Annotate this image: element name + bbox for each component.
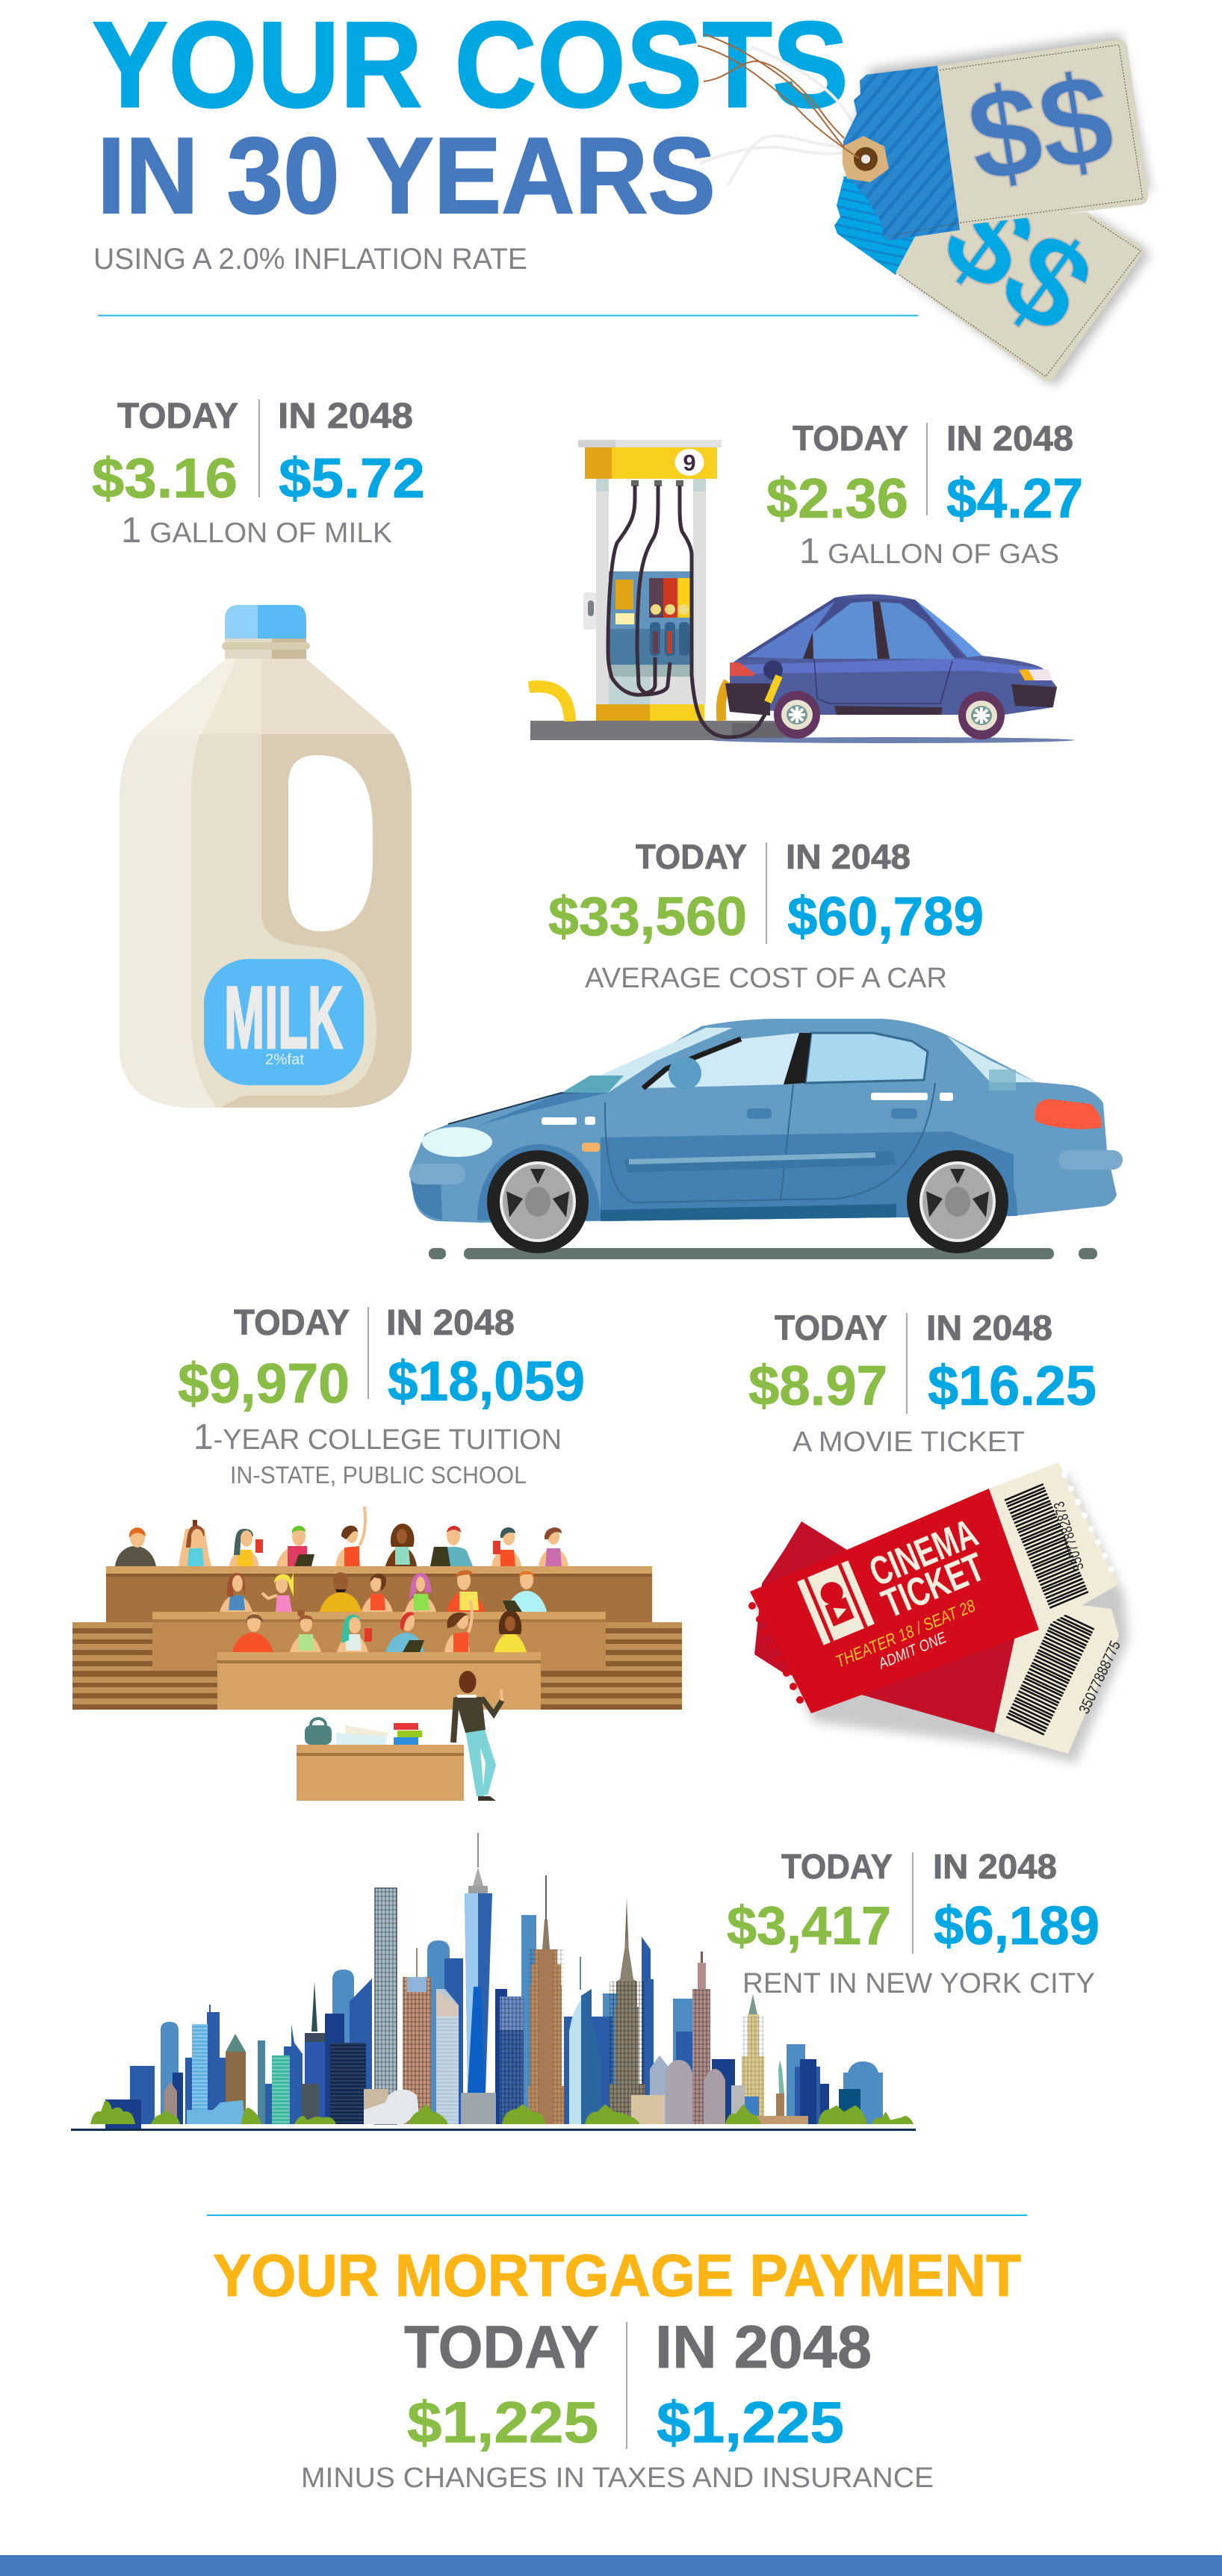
panel: milk price: TODAY	[117, 397, 238, 436]
statue of liberty	[752, 2060, 808, 2124]
panel: car price: $60,789	[787, 887, 984, 947]
desk items	[305, 1719, 422, 1745]
jug label: 2%fat	[265, 1052, 304, 1068]
jug cap	[222, 605, 310, 659]
title	[92, 0, 849, 236]
brick tower	[403, 1948, 431, 2124]
panel: gas price: TODAY	[793, 418, 908, 458]
subtitle: USING A 2.0% INFLATION RATE	[93, 243, 527, 276]
icon: cinema tickets	[748, 1462, 1128, 1763]
tag 1: $$	[958, 46, 1122, 210]
dark tower	[330, 2043, 366, 2124]
panel: tuition price: $18,059	[388, 1350, 585, 1412]
panel: milk price: $5.72	[279, 447, 425, 509]
panel: milk price: 1 GALLON OF MILK	[121, 511, 392, 550]
panel: rent price: RENT IN NEW YORK CITY	[742, 1968, 1095, 1999]
panel: mortgage price: $1,225	[407, 2389, 598, 2455]
panel: tuition price: 1-YEAR COLLEGE TUITION	[193, 1418, 562, 1457]
lecturer desk	[297, 1745, 464, 1801]
panel: tuition price: $9,970	[178, 1352, 350, 1415]
panel: gas price: $4.27	[946, 467, 1083, 530]
panel: tuition price: IN 2048	[386, 1303, 515, 1343]
tag 2: $$	[919, 161, 1118, 361]
icon: lecture hall	[72, 1506, 682, 1801]
tag 1	[843, 40, 1148, 240]
back ticket: 35077888775	[1076, 1639, 1124, 1716]
panel: tuition price: TODAY	[234, 1303, 350, 1343]
blue glass tower	[500, 1996, 524, 2124]
lecturer	[453, 1671, 502, 1801]
slim tower	[375, 1888, 397, 2124]
panel: mortgage price: MINUS CHANGES IN TAXES AND INSURANCE	[301, 2462, 934, 2494]
students row 3	[232, 1601, 527, 1652]
front wheel	[487, 1150, 589, 1253]
icon: milk jug	[120, 605, 412, 1108]
front ticket: 35077882873	[1051, 1500, 1088, 1572]
footer bar	[0, 2555, 1222, 2576]
panel: car price: IN 2048	[786, 837, 911, 876]
dark buildings	[105, 1989, 829, 2129]
icon: price tags	[698, 34, 1151, 385]
panel: gas price	[766, 418, 1083, 571]
panel: mortgage price	[301, 2314, 934, 2494]
front ticket: CINEMA	[863, 1510, 984, 1595]
back ticket	[754, 1521, 1124, 1754]
panel: rent price: $6,189	[934, 1896, 1100, 1956]
panel: milk price: $3.16	[92, 447, 238, 509]
chrysler	[610, 1897, 645, 2124]
panel: car price: TODAY	[636, 837, 747, 876]
panel: gas price: IN 2048	[946, 418, 1073, 458]
one world trade center	[461, 1833, 496, 2124]
students row 2	[220, 1570, 547, 1612]
mid buildings	[130, 1937, 820, 2124]
panel: movie price: $8.97	[748, 1354, 887, 1417]
jug label: MILK	[224, 969, 343, 1067]
icon: tag eyelet	[843, 136, 889, 182]
students row 1	[115, 1506, 568, 1566]
front ticket: THEATER 18 / SEAT 28	[833, 1595, 978, 1672]
panel: movie price	[748, 1308, 1097, 1458]
panel: movie price: TODAY	[775, 1308, 887, 1347]
curved glass tower	[569, 1957, 601, 2124]
ticket film icon	[797, 1560, 875, 1645]
front ticket	[748, 1462, 1119, 1713]
panel: gas price: 1 GALLON OF GAS	[799, 532, 1059, 571]
string	[698, 34, 859, 158]
icon: gas pump: 9	[683, 450, 696, 476]
bushes	[90, 2101, 914, 2124]
panel: gas price: $2.36	[766, 467, 908, 530]
panel: car price: $33,560	[548, 887, 747, 947]
panel: movie price: A MOVIE TICKET	[793, 1427, 1025, 1458]
icon: blue car	[409, 1019, 1123, 1259]
tag 2	[834, 161, 1144, 382]
title: IN 30 YEARS	[97, 115, 716, 236]
small towers	[164, 1981, 860, 2124]
panel: tuition price	[178, 1303, 585, 1489]
icon: new york skyline	[71, 1833, 916, 2131]
title: YOUR COSTS	[92, 0, 849, 133]
panel: mortgage price: TODAY	[404, 2314, 599, 2381]
panel: rent price: TODAY	[781, 1847, 893, 1886]
panel: movie price: $16.25	[928, 1354, 1097, 1417]
front ticket: TICKET	[875, 1545, 990, 1627]
pink tower	[692, 1952, 710, 2124]
panel: car price: AVERAGE COST OF A CAR	[585, 963, 947, 994]
icon: gas pump	[529, 440, 802, 740]
rear wheel	[907, 1150, 1008, 1253]
panel: rent price: $3,417	[727, 1896, 891, 1956]
striped tower	[436, 1989, 459, 2124]
front ticket: ADMIT ONE	[875, 1629, 949, 1673]
panel: milk price	[92, 397, 425, 550]
panel: tuition price: IN-STATE, PUBLIC SCHOOL	[230, 1462, 527, 1489]
panel: mortgage price: IN 2048	[655, 2314, 872, 2381]
panel: rent price	[727, 1847, 1100, 1999]
jug label	[204, 959, 364, 1085]
panel: rent price: IN 2048	[933, 1847, 1057, 1886]
back buildings	[161, 1915, 883, 2124]
panel: car price	[548, 837, 984, 994]
heading: mortgage: YOUR MORTGAGE PAYMENT	[213, 2242, 1021, 2309]
panel: movie price: IN 2048	[926, 1308, 1052, 1347]
empire state	[528, 1875, 564, 2124]
icon: purple car	[713, 595, 1074, 743]
panel: milk price: IN 2048	[278, 397, 413, 436]
panel: mortgage price: $1,225	[657, 2389, 844, 2455]
beige tower	[742, 1994, 764, 2124]
